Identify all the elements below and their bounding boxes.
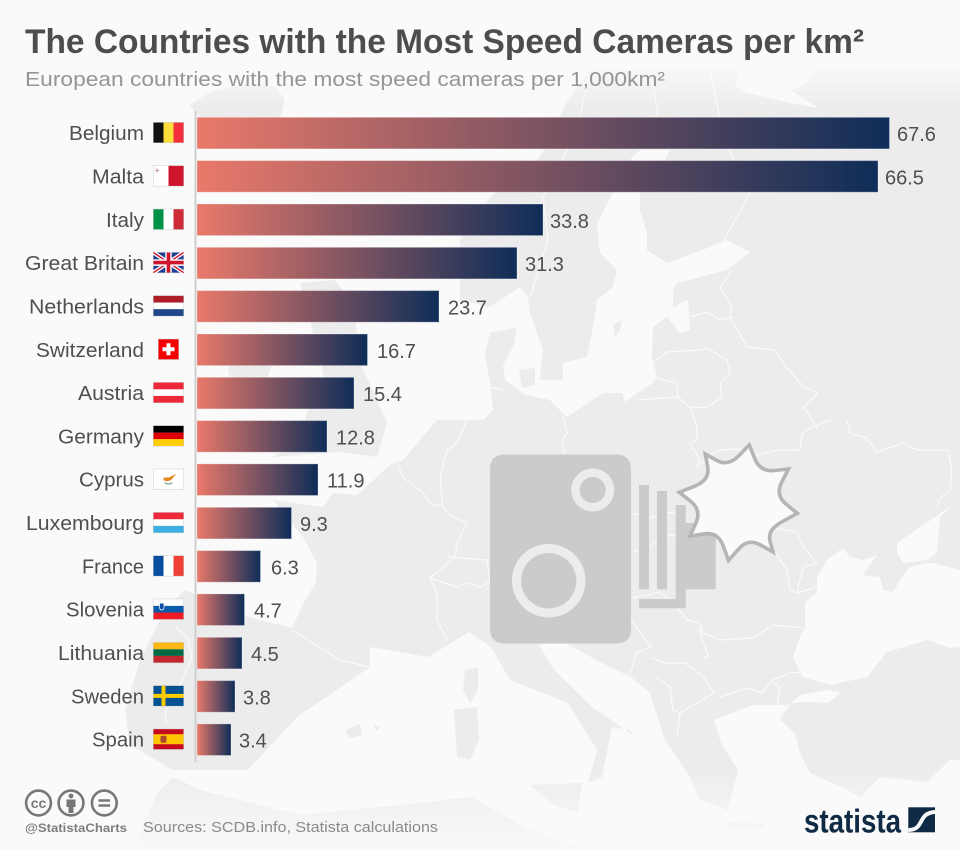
sources: Sources: SCDB.info, Statista calculations (143, 819, 438, 836)
row: Sweden (71, 681, 271, 712)
statista logo (804, 802, 935, 840)
value: 31.3: 31.3 (525, 254, 564, 276)
map: Sea of Marmara (780, 690, 842, 718)
bar: Switzerland 16.7 (197, 334, 368, 366)
row: Cyprus (79, 464, 364, 496)
bar: Spain 3.4 (197, 724, 231, 756)
value: 6.3: 6.3 (271, 557, 299, 579)
label: Austria: Austria (78, 383, 145, 405)
camera flash bars (639, 485, 716, 608)
label: Great Britain: Great Britain (25, 253, 144, 275)
flag: Luxembourg (153, 512, 184, 533)
handle: @StatistaCharts (25, 821, 127, 835)
row: Switzerland (36, 334, 416, 366)
flag: Sweden (153, 685, 184, 706)
row: Spain (92, 724, 267, 756)
row: France (82, 551, 299, 582)
label: Netherlands: Netherlands (29, 296, 144, 318)
bar: France 6.3 (197, 551, 260, 582)
bar: Austria 15.4 (197, 377, 354, 409)
value: 3.8: 3.8 (243, 687, 271, 709)
value: 66.5: 66.5 (885, 167, 924, 189)
speed camera icon (490, 445, 797, 644)
label: France: France (82, 556, 144, 578)
flag: Austria (153, 382, 184, 403)
bar: Malta 66.5 (197, 161, 878, 192)
bar: Sweden 3.8 (197, 681, 235, 712)
row: Netherlands (29, 291, 487, 322)
bar: Luxembourg 9.3 (197, 507, 292, 539)
label: Lithuania: Lithuania (58, 643, 145, 665)
map: Black Sea (793, 548, 960, 685)
subtitle: European countries with the most speed cameras per 1,000km² (25, 69, 665, 91)
map: Gotland (613, 320, 622, 337)
value: 15.4: 15.4 (363, 384, 402, 406)
map: Ireland (228, 335, 272, 395)
axis line (194, 111, 196, 762)
map: Sea of Azov (897, 505, 953, 563)
row: Luxembourg (26, 507, 328, 539)
logo mark (908, 807, 935, 832)
flag: Switzerland (158, 339, 179, 360)
row: Lithuania (58, 637, 279, 669)
flag: France (153, 555, 184, 576)
map: Sicily (530, 783, 582, 812)
map: England and Scotland (273, 280, 387, 457)
map: borders (165, 70, 952, 737)
map: Danish islands (519, 368, 535, 388)
map: North Africa (133, 777, 590, 850)
label: Switzerland: Switzerland (36, 340, 144, 362)
map: bottom fade (0, 765, 960, 850)
label: Sweden: Sweden (71, 686, 144, 708)
bar: Lithuania 4.5 (197, 637, 242, 669)
row: Malta (92, 161, 924, 192)
value: 12.8: 12.8 (336, 427, 375, 449)
row: Austria (78, 377, 402, 409)
flag: Germany (153, 425, 184, 446)
flash burst (679, 445, 797, 560)
label: Cyprus: Cyprus (79, 470, 144, 492)
flag: Netherlands (153, 295, 184, 316)
row: Belgium (69, 117, 936, 149)
map: Sardinia (454, 707, 479, 760)
label: Italy: Italy (106, 210, 144, 232)
flag: Cyprus (153, 469, 184, 490)
value: 16.7: 16.7 (377, 341, 416, 363)
label: Malta: Malta (92, 166, 145, 188)
logo wordmark: statista (804, 802, 902, 840)
bar: Cyprus 11.9 (197, 464, 318, 496)
flag: Slovenia (153, 599, 184, 620)
value: 4.7: 4.7 (254, 601, 282, 623)
value: 23.7: 23.7 (448, 297, 487, 319)
flag: Spain (153, 729, 184, 750)
flag: Great Britain (153, 252, 184, 273)
row: Great Britain (25, 247, 564, 279)
value: 3.4: 3.4 (239, 731, 267, 753)
value: 9.3: 9.3 (300, 514, 328, 536)
label: Belgium: Belgium (69, 123, 144, 145)
map: Balearics (345, 724, 380, 738)
value: 4.5: 4.5 (251, 644, 279, 666)
bar: Germany 12.8 (197, 421, 327, 452)
label: Slovenia: Slovenia (66, 600, 145, 622)
icon: attribution (59, 791, 83, 815)
map: Corsica (463, 667, 478, 703)
bar: Belgium 67.6 (197, 117, 890, 149)
map: Iceland (190, 84, 285, 118)
row: Germany (58, 421, 375, 452)
map: White Sea (735, 70, 818, 108)
value: 11.9: 11.9 (327, 471, 364, 493)
label: Germany: Germany (58, 426, 144, 448)
flag: Belgium (153, 122, 184, 143)
row: Slovenia (66, 594, 282, 626)
map: Crete (725, 822, 765, 830)
icon: creative commons: cc (31, 795, 46, 811)
value: 67.6: 67.6 (897, 124, 936, 146)
label: Luxembourg: Luxembourg (26, 513, 144, 535)
value: 33.8: 33.8 (550, 211, 589, 233)
icon: no derivatives (92, 791, 117, 815)
bar: Great Britain 31.3 (197, 247, 517, 279)
map: top fade (0, 60, 960, 110)
flag: Italy (153, 209, 184, 230)
camera body (490, 454, 631, 644)
label: Spain: Spain (92, 730, 144, 752)
flag: Malta (153, 165, 184, 186)
bar: Italy 33.8 (197, 204, 543, 236)
title: The Countries with the Most Speed Cameras per km² (25, 23, 864, 61)
licence icons (26, 791, 117, 815)
flag: Lithuania (153, 642, 184, 663)
bar: Netherlands 23.7 (197, 291, 439, 322)
bar: Slovenia 4.7 (197, 594, 244, 626)
row: Italy (106, 204, 589, 236)
